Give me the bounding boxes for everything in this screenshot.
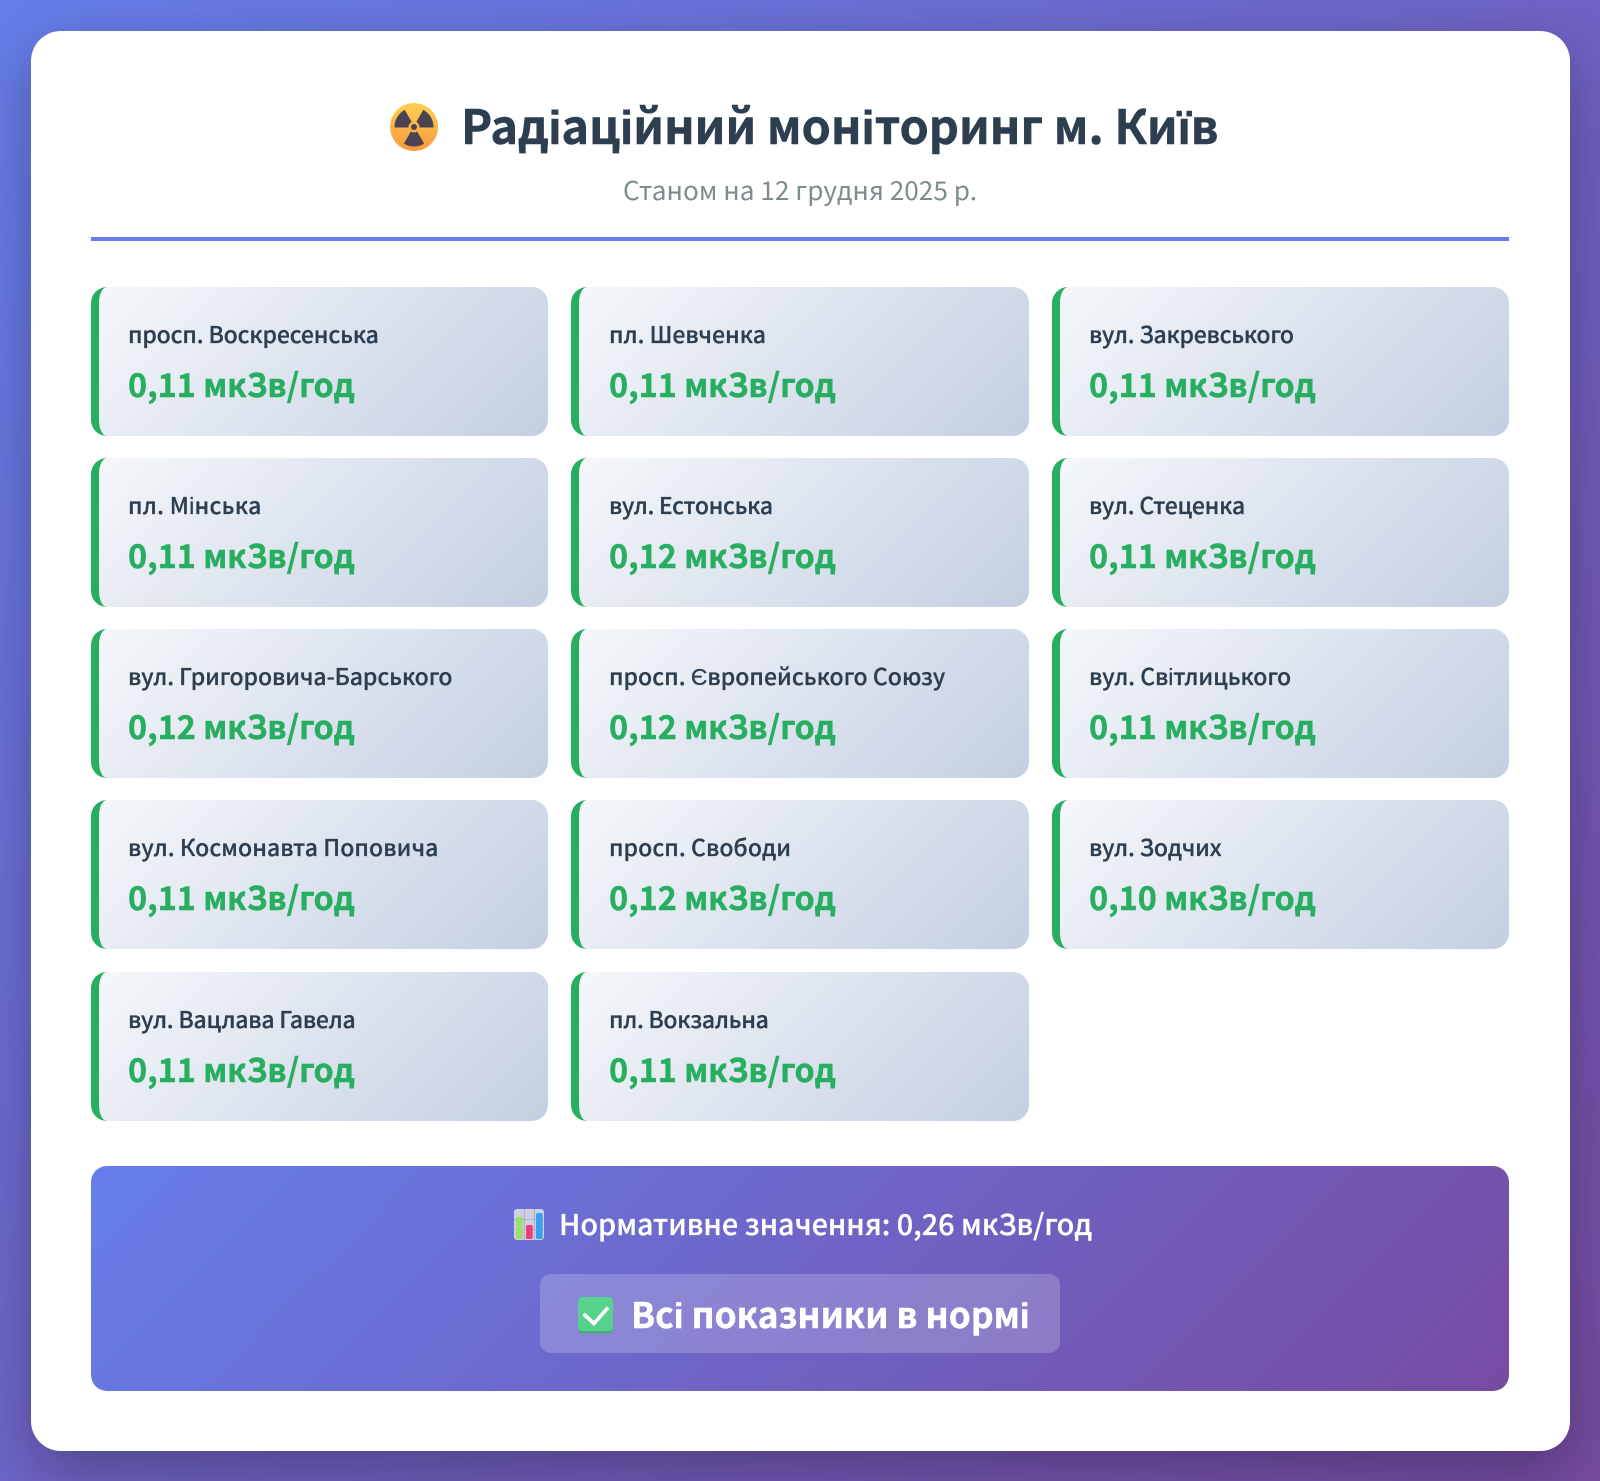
- card: пл. Шевченка: 0,11 мкЗв/год: [609, 360, 836, 407]
- card: вул. Закревського: [1052, 287, 1509, 436]
- card: вул. Закревського: 0,11 мкЗв/год: [1089, 360, 1316, 407]
- card: пл. Вокзальна: 0,11 мкЗв/год: [609, 1045, 836, 1092]
- card: вул. Закревського: вул. Закревського: [1089, 316, 1294, 350]
- card: пл. Вокзальна: [571, 972, 1029, 1120]
- status text: Всі показники в нормі: [631, 1288, 1030, 1339]
- card: вул. Світлицького: 0,11 мкЗв/год: [1089, 702, 1316, 749]
- card: вул. Григоровича-Барського: [91, 629, 548, 778]
- icon: bar chart: [514, 1209, 544, 1240]
- card: вул. Вацлава Гавела: 0,11 мкЗв/год: [128, 1045, 355, 1092]
- card: просп. Європейського Союзу: просп. Європейського Союзу: [609, 658, 945, 692]
- card: вул. Космонавта Поповича: вул. Космонавта Поповича: [128, 829, 438, 863]
- card: вул. Стеценка: 0,11 мкЗв/год: [1089, 531, 1316, 578]
- normative value: Нормативне значення: 0,26 мкЗв/год: [559, 1203, 1092, 1244]
- card: вул. Естонська: вул. Естонська: [609, 487, 773, 521]
- card: вул. Вацлава Гавела: [91, 972, 548, 1120]
- icon: check mark: [578, 1297, 613, 1333]
- card: вул. Зодчих: [1052, 800, 1509, 948]
- card: просп. Свободи: 0,12 мкЗв/год: [609, 873, 836, 920]
- card: вул. Стеценка: [1052, 458, 1509, 606]
- status box: [540, 1274, 1060, 1352]
- card: просп. Європейського Союзу: 0,12 мкЗв/год: [609, 702, 836, 749]
- card: просп. Європейського Союзу: [571, 629, 1029, 778]
- card: пл. Шевченка: пл. Шевченка: [609, 316, 766, 350]
- card: вул. Григоровича-Барського: 0,12 мкЗв/год: [128, 702, 355, 749]
- card: вул. Естонська: 0,12 мкЗв/год: [609, 531, 836, 578]
- card: вул. Вацлава Гавела: вул. Вацлава Гавела: [128, 1001, 356, 1035]
- card: вул. Світлицького: вул. Світлицького: [1089, 658, 1291, 692]
- card: пл. Мінська: 0,11 мкЗв/год: [128, 531, 355, 578]
- title: Радіаційний моніторинг м. Київ: [461, 90, 1219, 158]
- card: просп. Воскресенська: 0,11 мкЗв/год: [128, 360, 355, 407]
- card: пл. Вокзальна: пл. Вокзальна: [609, 1001, 769, 1035]
- icon: radiation: [390, 103, 438, 151]
- card: вул. Зодчих: вул. Зодчих: [1089, 829, 1222, 863]
- card: пл. Шевченка: [571, 287, 1029, 436]
- card: вул. Космонавта Поповича: 0,11 мкЗв/год: [128, 873, 355, 920]
- card: просп. Свободи: просп. Свободи: [609, 829, 791, 863]
- card: просп. Свободи: [571, 800, 1029, 948]
- card: вул. Космонавта Поповича: [91, 800, 548, 948]
- card: вул. Естонська: [571, 458, 1029, 606]
- card: вул. Григоровича-Барського: вул. Григоровича-Барського: [128, 658, 452, 692]
- card: пл. Мінська: пл. Мінська: [128, 487, 262, 521]
- card: вул. Зодчих: 0,10 мкЗв/год: [1089, 873, 1316, 920]
- card: пл. Мінська: [91, 458, 548, 606]
- card: вул. Стеценка: вул. Стеценка: [1089, 487, 1245, 521]
- panel: footer: [91, 1166, 1509, 1391]
- card: просп. Воскресенська: просп. Воскресенська: [128, 316, 379, 350]
- subtitle: Станом на 12 грудня 2025 р.: [623, 170, 977, 208]
- card: просп. Воскресенська: [91, 287, 548, 436]
- card: вул. Світлицького: [1052, 629, 1509, 778]
